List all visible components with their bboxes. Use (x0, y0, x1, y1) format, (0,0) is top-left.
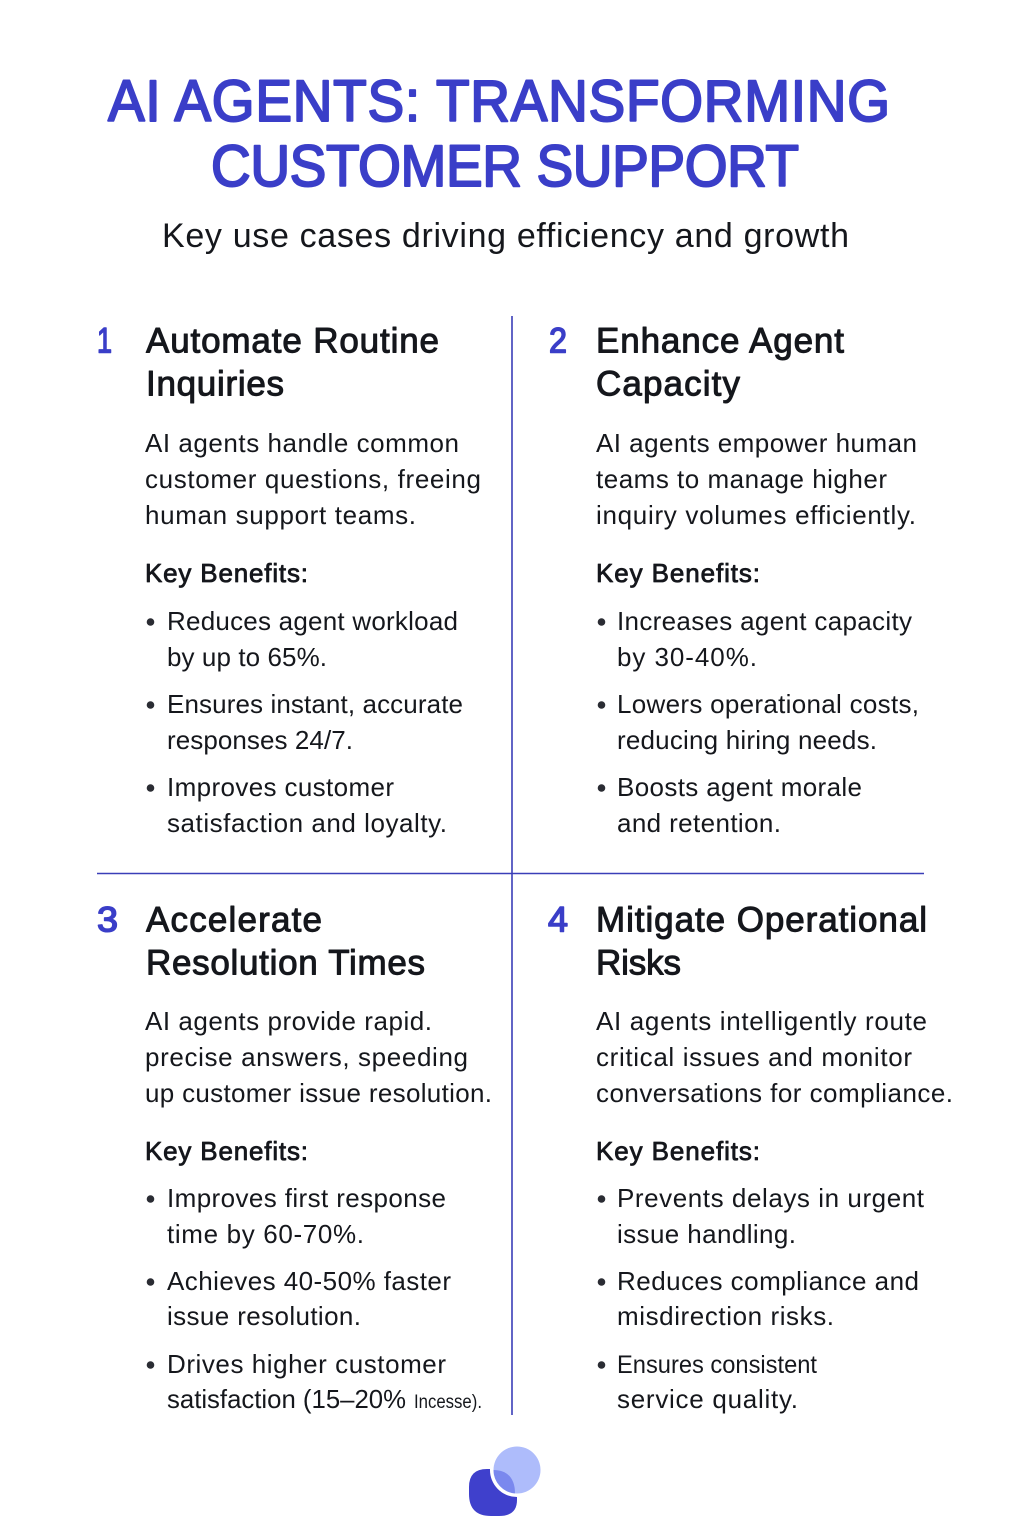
heading 2: Enhance Agent (596, 322, 844, 360)
subtitle: Key use cases driving efficiency and growth (162, 217, 849, 255)
benefits list 2: Increases agent capacity (617, 606, 912, 636)
benefits list 3: Incesse). (414, 1392, 482, 1413)
description 4: AI agents intelligently route (596, 1006, 927, 1036)
panel: automate routine inquiries (97, 322, 481, 838)
description 3: precise answers, speeding (145, 1042, 468, 1072)
benefits list 1: Ensures instant, accurate (167, 689, 463, 719)
benefits list 1: Improves customer (167, 772, 394, 802)
description 2: teams to manage higher (596, 464, 887, 494)
benefits list 1: by up to 65%. (167, 642, 327, 672)
description 3 (145, 1006, 492, 1108)
benefits list 3: time by 60-70%. (167, 1219, 364, 1249)
benefits list 2: and retention. (617, 808, 781, 838)
benefits list 4 (598, 1183, 925, 1414)
heading 4: Mitigate Operational (596, 900, 927, 940)
key benefits label 2: Key Benefits: (596, 558, 760, 588)
benefits list 2: Boosts agent morale (617, 772, 862, 802)
heading 4 (596, 900, 927, 982)
key benefits label 4: Key Benefits: (596, 1136, 760, 1166)
heading 4: Risks (596, 944, 681, 982)
heading 3 (146, 900, 425, 982)
description 2: inquiry volumes efficiently. (596, 500, 916, 530)
benefits list 1: Reduces agent workload (167, 606, 458, 636)
key benefits label 1: Key Benefits: (145, 558, 308, 588)
heading 1 (146, 322, 439, 404)
heading 1: Inquiries (146, 364, 284, 404)
benefits list 1 (147, 606, 463, 838)
description 4 (596, 1006, 953, 1108)
heading 2 (596, 322, 844, 404)
description 1: customer questions, freeing (145, 464, 481, 494)
benefits list 3 (147, 1183, 482, 1414)
description 2: AI agents empower human (596, 428, 917, 458)
heading 1: Automate Routine (146, 322, 439, 360)
description 1 (145, 428, 481, 530)
key benefits label 3: Key Benefits: (145, 1136, 308, 1166)
description 3: up customer issue resolution. (145, 1078, 492, 1108)
heading 3: Accelerate (146, 900, 322, 940)
title (108, 68, 890, 199)
panel: accelerate resolution times (97, 900, 492, 1414)
panel: mitigate operational risks (548, 900, 953, 1414)
number 2: 2 (549, 322, 567, 360)
description 3: AI agents provide rapid. (145, 1006, 432, 1036)
benefits list 4: Prevents delays in urgent (617, 1183, 925, 1213)
benefits list 2: reducing hiring needs. (617, 725, 877, 755)
description 4: critical issues and monitor (596, 1042, 912, 1072)
heading 2: Capacity (596, 364, 740, 404)
title: AI AGENTS: TRANSFORMING (108, 68, 890, 134)
benefits list 2: Lowers operational costs, (617, 689, 919, 719)
benefits list 2 (598, 606, 919, 838)
benefits list 2: by 30-40%. (617, 642, 757, 672)
title: CUSTOMER SUPPORT (211, 133, 799, 199)
icon: overlapping shapes logo (469, 1446, 540, 1516)
benefits list 4: misdirection risks. (617, 1301, 834, 1331)
description 1: AI agents handle common (145, 428, 459, 458)
benefits list 1: satisfaction and loyalty. (167, 808, 447, 838)
benefits list 4: Reduces compliance and (617, 1266, 919, 1296)
benefits list 3: Achieves 40-50% faster (167, 1266, 451, 1296)
description 1: human support teams. (145, 500, 416, 530)
benefits list 3: Improves first response (167, 1183, 446, 1213)
number 4: 4 (548, 900, 568, 940)
benefits list 3: satisfaction (15–20% (167, 1384, 406, 1414)
benefits list 3: issue resolution. (167, 1301, 361, 1331)
description 2 (596, 428, 917, 530)
number 1: 1 (97, 322, 112, 360)
benefits list 3: Drives higher customer (167, 1349, 446, 1379)
benefits list 4: Ensures consistent (617, 1351, 817, 1379)
benefits list 1: responses 24/7. (167, 725, 353, 755)
heading 3: Resolution Times (146, 944, 425, 982)
panel: enhance agent capacity (549, 322, 919, 838)
benefits list 4: issue handling. (617, 1219, 796, 1249)
benefits list 4: service quality. (617, 1384, 798, 1414)
number 3: 3 (97, 900, 118, 940)
description 4: conversations for compliance. (596, 1078, 953, 1108)
